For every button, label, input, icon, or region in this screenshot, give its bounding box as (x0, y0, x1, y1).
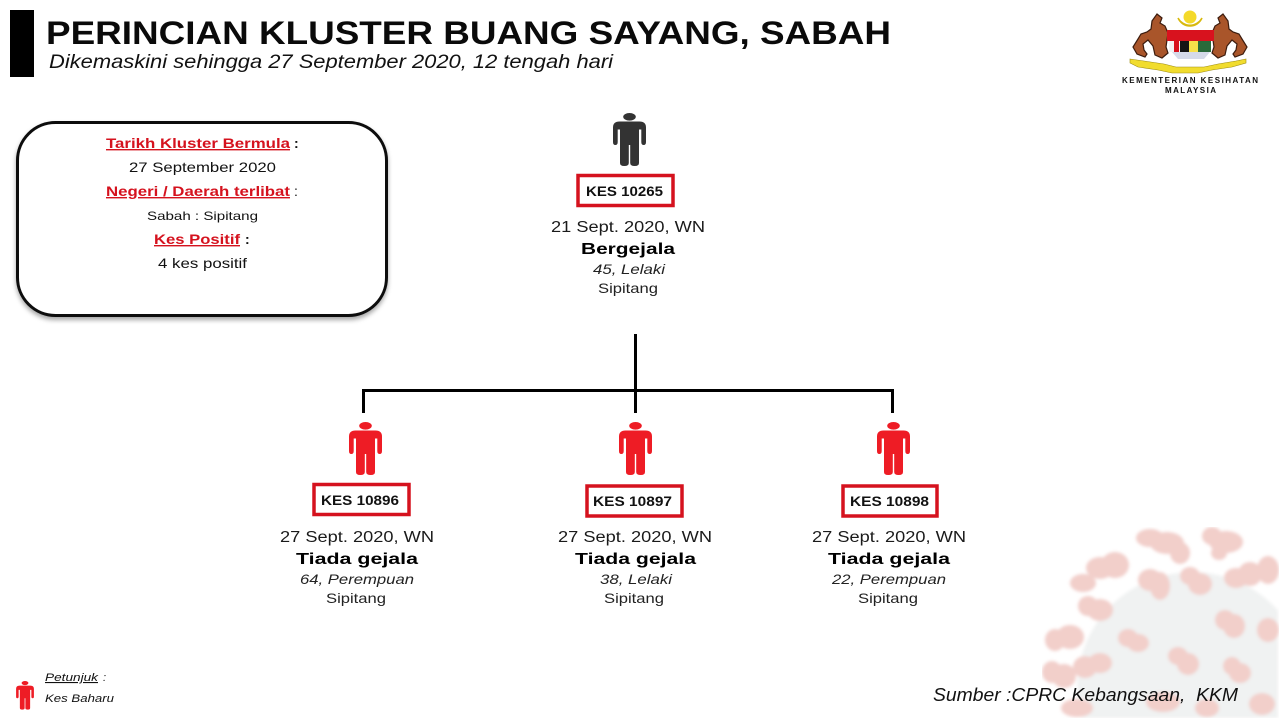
icon: coat of arms (1130, 10, 1247, 73)
heading: cluster start date: : (294, 135, 299, 151)
case details (812, 529, 966, 606)
logo: Kementerian Kesihatan Malaysia (1122, 10, 1258, 95)
case: KES 10265 (551, 113, 705, 296)
case details: Sipitang (326, 590, 386, 606)
background virus illustration (1042, 527, 1279, 718)
case ID box: KES 10898 (850, 493, 929, 509)
case details: Sipitang (604, 590, 664, 606)
case details: Sipitang (598, 280, 658, 296)
heading: cluster start date: Tarikh Kluster Bermula (106, 135, 290, 151)
case ID box (587, 486, 682, 516)
case details: Tiada gejala (575, 551, 696, 568)
case details: Sipitang (858, 590, 918, 606)
icon: new case person (349, 422, 382, 475)
case details (280, 529, 434, 606)
case details: 64, Perempuan (300, 571, 414, 587)
icon: new case person (619, 422, 652, 475)
case details (551, 219, 705, 296)
case ID box: KES 10896 (321, 492, 399, 508)
legend (16, 672, 114, 710)
title accent bar (10, 10, 34, 77)
icon: index case person (613, 113, 646, 166)
title: PERINCIAN KLUSTER BUANG SAYANG, SABAH (46, 15, 891, 51)
heading: positive cases: : (245, 231, 250, 247)
case details: Bergejala (581, 241, 675, 258)
case details: Tiada gejala (828, 551, 950, 568)
case ID box (843, 486, 937, 516)
case details: 22, Perempuan (831, 571, 946, 587)
text: case count: 4 kes positif (158, 255, 247, 271)
icon: new case person (877, 422, 910, 475)
text: start date: 27 September 2020 (129, 159, 276, 175)
case details: 38, Lelaki (600, 571, 673, 587)
case ID box (578, 176, 673, 206)
case details: 27 Sept. 2020, WN (558, 529, 712, 546)
heading: state and district: Negeri / Daerah terlibat (106, 183, 290, 199)
icon: legend person (16, 681, 34, 710)
case details: 27 Sept. 2020, WN (812, 529, 966, 546)
connector tree (364, 334, 892, 413)
case: KES 10896 (280, 422, 434, 606)
case: KES 10897 (558, 422, 712, 606)
case details (558, 529, 712, 606)
case details: 27 Sept. 2020, WN (280, 529, 434, 546)
legend heading: Petunjuk (45, 672, 99, 684)
case ID box: KES 10265 (586, 183, 663, 199)
case details: 21 Sept. 2020, WN (551, 219, 705, 236)
heading: positive cases: Kes Positif (154, 231, 240, 247)
case ID box: KES 10897 (593, 493, 672, 509)
heading: state and district: : (294, 183, 298, 199)
text: location: Sabah : Sipitang (147, 209, 258, 223)
logo label: MALAYSIA (1165, 86, 1216, 95)
case: KES 10898 (812, 422, 966, 606)
case details: 45, Lelaki (593, 261, 666, 277)
legend label: Kes Baharu (45, 693, 114, 705)
panel: cluster summary (18, 122, 386, 316)
subtitle: Dikemaskini sehingga 27 September 2020, 12 tengah hari (49, 52, 614, 73)
logo label (1122, 76, 1258, 95)
source note: Sumber :CPRC Kebangsaan, KKM (933, 685, 1238, 705)
logo label: KEMENTERIAN KESIHATAN (1122, 76, 1258, 85)
case details: Tiada gejala (296, 551, 418, 568)
case ID box (314, 484, 409, 514)
legend heading: : (103, 672, 106, 684)
